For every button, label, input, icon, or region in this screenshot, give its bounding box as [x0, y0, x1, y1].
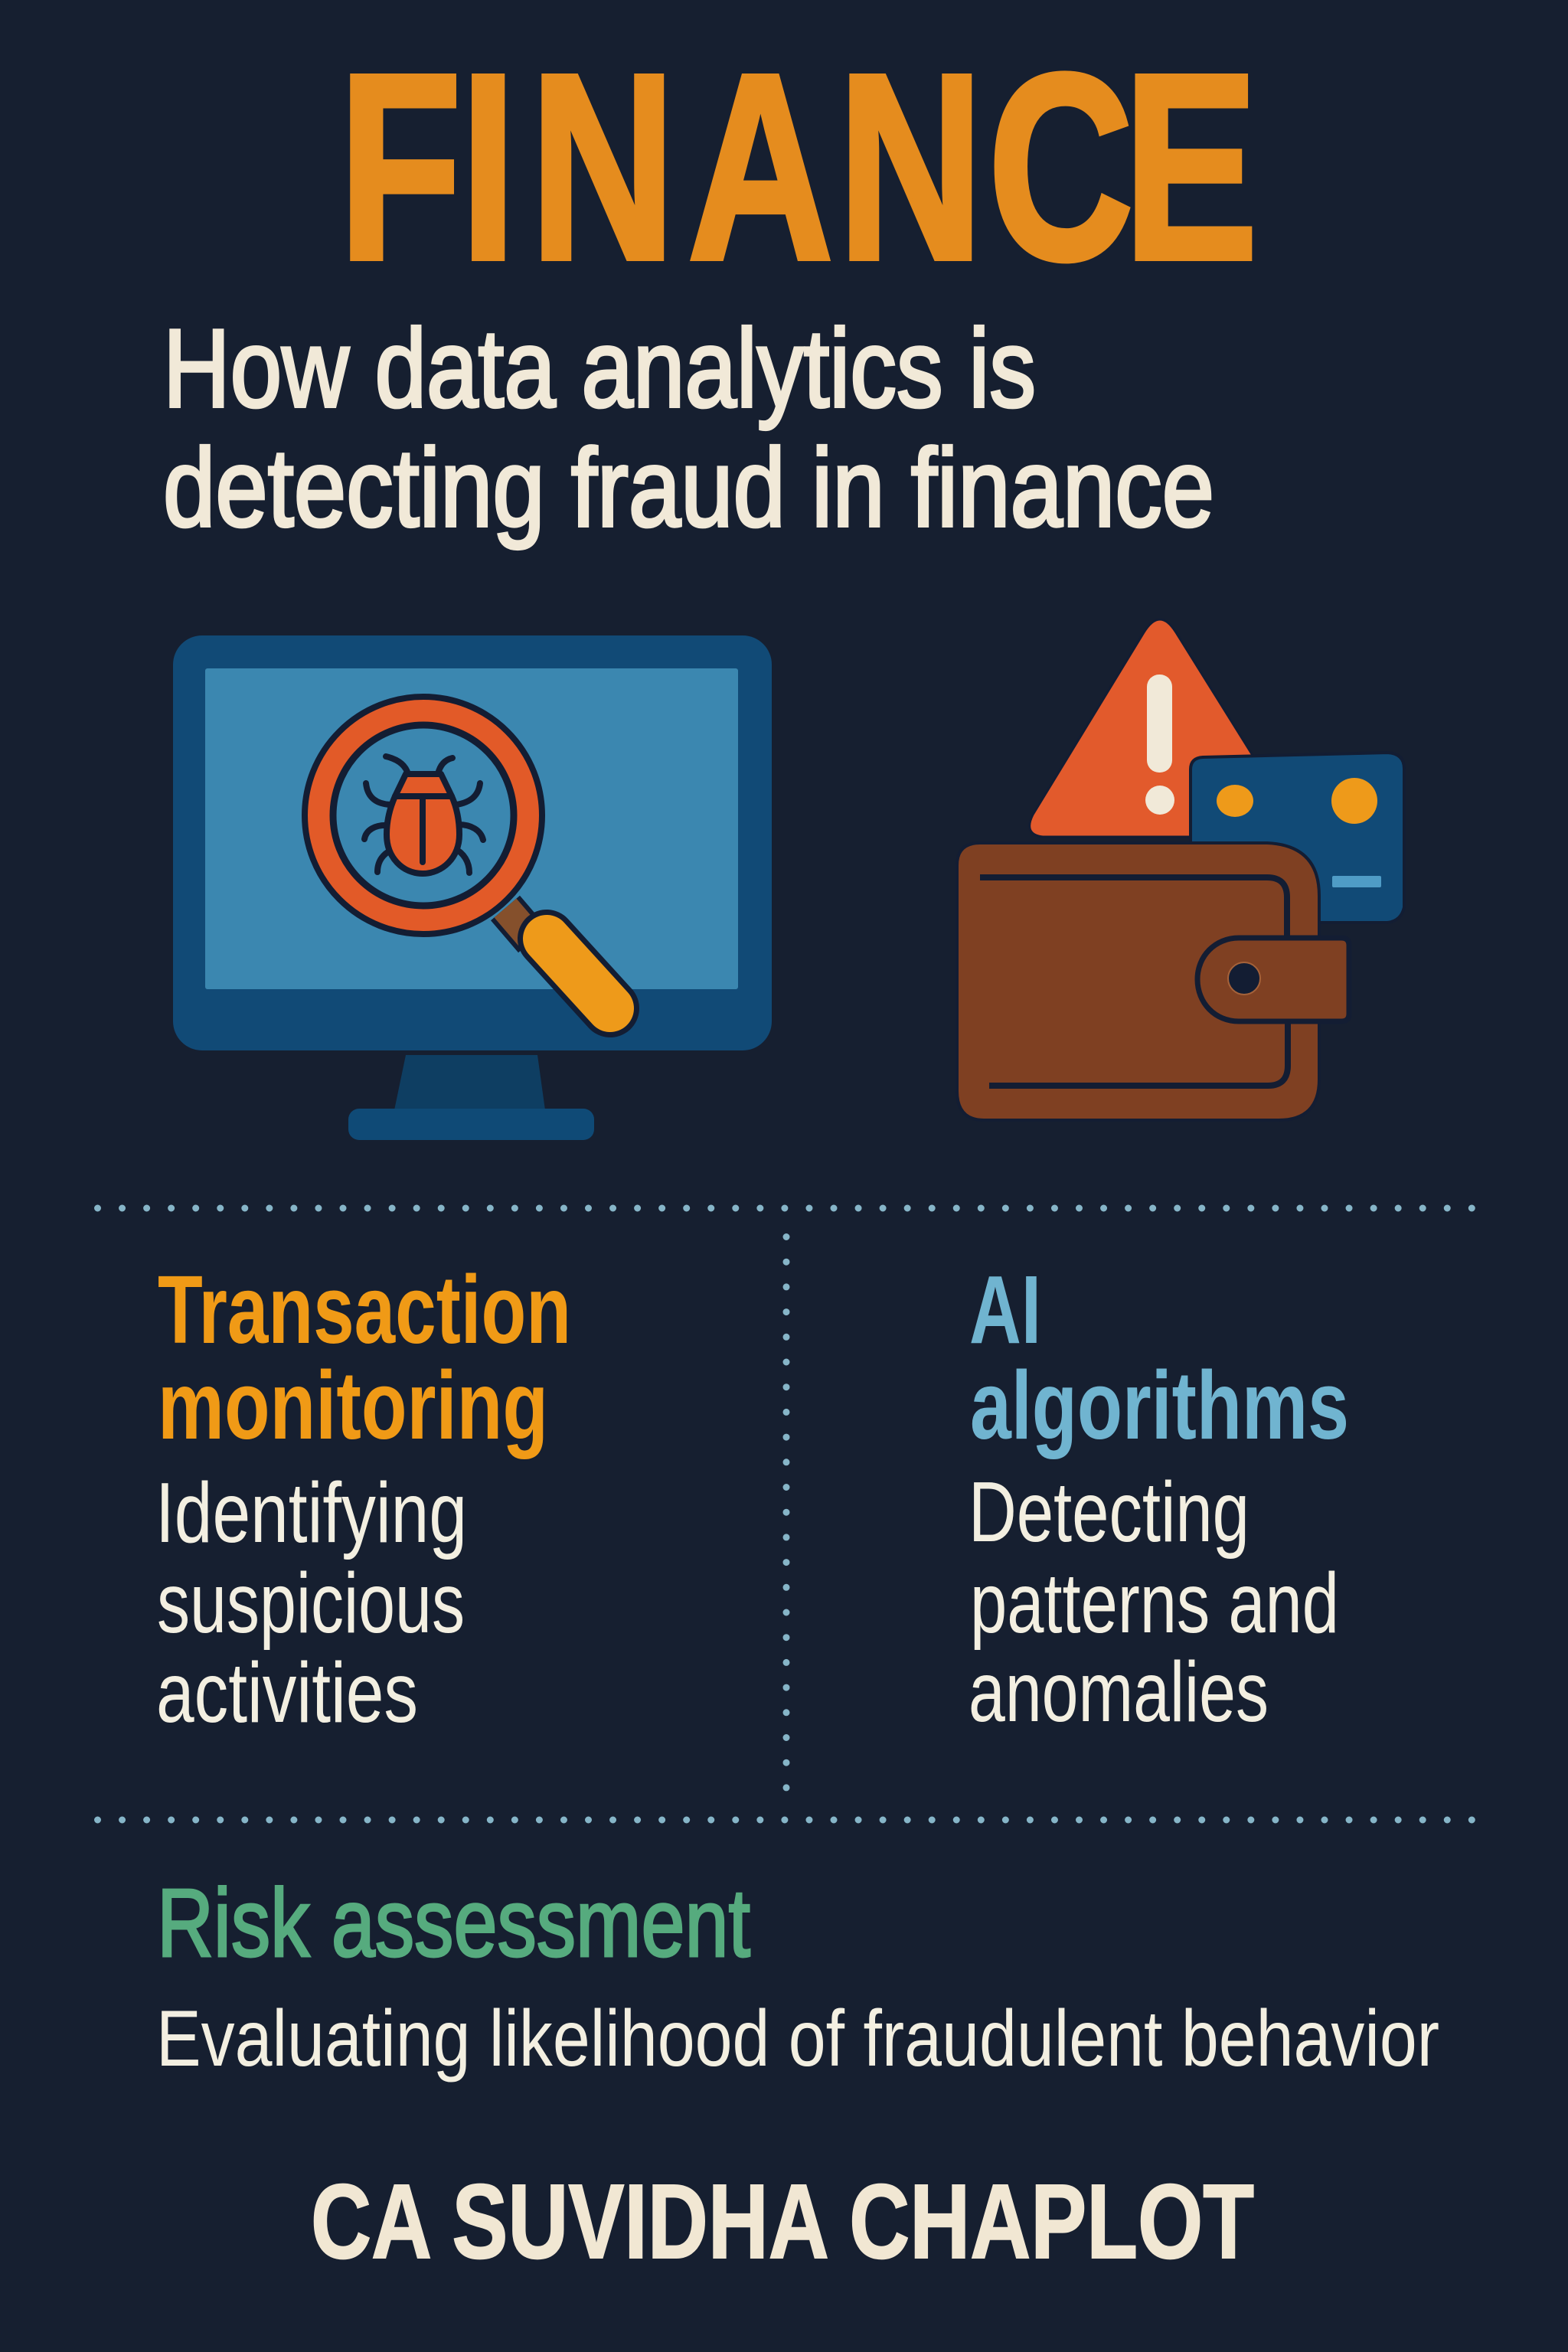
heading: AI algorithms: algorithms [970, 1351, 1349, 1459]
panel: AI algorithms [969, 1256, 1349, 1740]
credit card [1191, 753, 1404, 923]
subtitle: How data analytics is [163, 306, 1036, 430]
icon: monitor with magnifying glass and bug [173, 635, 772, 1140]
icon: warning triangle, credit card and wallet [957, 619, 1404, 1120]
description: detecting patterns and anomalies: Detecting [969, 1465, 1250, 1560]
bug [364, 756, 483, 874]
heading: AI algorithms [969, 1256, 1349, 1459]
wallet body [957, 843, 1319, 1120]
subtitle: detecting fraud in finance [163, 426, 1214, 550]
description: detecting patterns and anomalies: patterns and [970, 1556, 1339, 1651]
warning triangle [1030, 619, 1257, 837]
monitor body [173, 635, 772, 1050]
description: identifying suspicious activities: suspicious [157, 1556, 465, 1651]
heading: risk assessment: Risk assessment [157, 1869, 750, 1977]
author credit: CA SUVIDHA CHAPLOT [311, 2163, 1254, 2281]
heading: transaction monitoring: Transaction [158, 1256, 571, 1364]
warning exclamation mark [1145, 675, 1174, 815]
horizontal dotted dividers and vertical dotted divider [98, 1208, 1478, 1820]
description: identifying suspicious activities: Identifying [155, 1465, 467, 1560]
monitor stand [394, 1055, 545, 1110]
description: detecting patterns and anomalies [969, 1465, 1339, 1740]
description: detecting patterns and anomalies: anomalies [969, 1645, 1269, 1740]
monitor base [348, 1109, 594, 1140]
monitor screen [205, 668, 738, 989]
description: identifying suspicious activities: activities [156, 1645, 418, 1740]
heading: transaction monitoring [158, 1256, 571, 1459]
magnifying glass [305, 697, 610, 1008]
heading: AI algorithms: AI [969, 1256, 1041, 1364]
description: identifying suspicious activities [155, 1465, 467, 1740]
wallet strap with button [1197, 938, 1349, 1021]
title: FINANCE [338, 20, 1258, 315]
panel: risk assessment [156, 1869, 1439, 2083]
heading: transaction monitoring: monitoring [158, 1351, 548, 1459]
panel: transaction monitoring [155, 1256, 571, 1740]
subtitle [163, 306, 1214, 550]
